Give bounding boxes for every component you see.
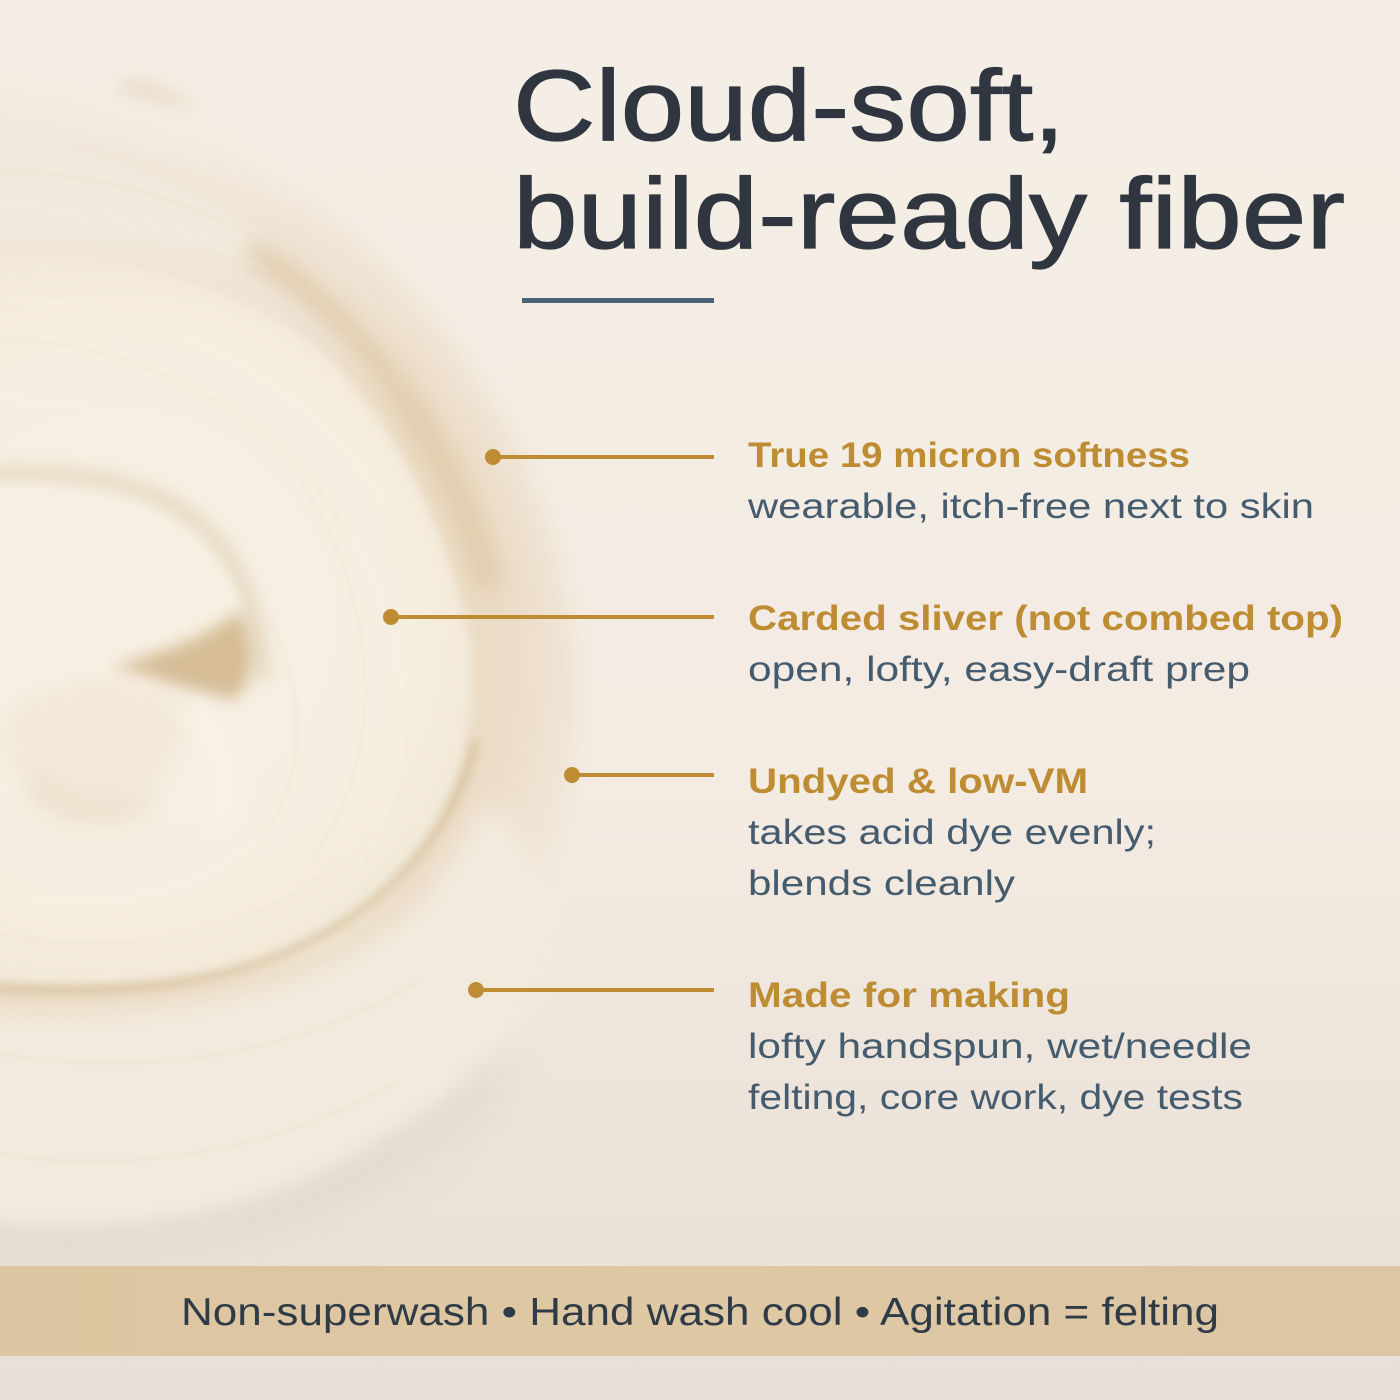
text: undyed xyxy=(748,813,1156,903)
heading: carded sliver: Carded sliver (not combed top) xyxy=(748,599,1343,638)
callout: undyed xyxy=(564,762,1156,903)
care text: Non-superwash • Hand wash cool • Agitation = felting xyxy=(181,1291,1219,1334)
title: Cloud-soft, xyxy=(513,50,1065,162)
bottom care banner xyxy=(0,1266,1400,1356)
text: undyed: takes acid dye evenly; xyxy=(748,813,1156,852)
title xyxy=(513,50,1345,270)
text: made for making: felting, core work, dye tests xyxy=(748,1078,1243,1117)
heading: undyed: Undyed & low-VM xyxy=(748,762,1088,801)
text: carded sliver: open, lofty, easy-draft prep xyxy=(748,650,1250,689)
callout: softness xyxy=(485,436,1314,526)
pointer: made for making xyxy=(468,982,714,998)
pointer: carded sliver xyxy=(383,609,714,625)
callout: carded sliver xyxy=(383,599,1343,689)
heading: made for making: Made for making xyxy=(748,976,1070,1015)
fibre strands xyxy=(0,170,440,1162)
heading: softness: True 19 micron softness xyxy=(748,436,1190,475)
wool roving photo xyxy=(0,69,578,1262)
callout: made for making xyxy=(468,976,1252,1117)
pointer: undyed xyxy=(564,767,714,783)
text: softness: wearable, itch-free next to skin xyxy=(747,487,1314,526)
pointer: softness xyxy=(485,449,714,465)
text: undyed: blends cleanly xyxy=(748,864,1016,903)
text: made for making xyxy=(748,1027,1252,1117)
title: build-ready fiber xyxy=(513,158,1345,270)
text: made for making: lofty handspun, wet/needle xyxy=(748,1027,1252,1066)
title underline xyxy=(522,298,714,303)
